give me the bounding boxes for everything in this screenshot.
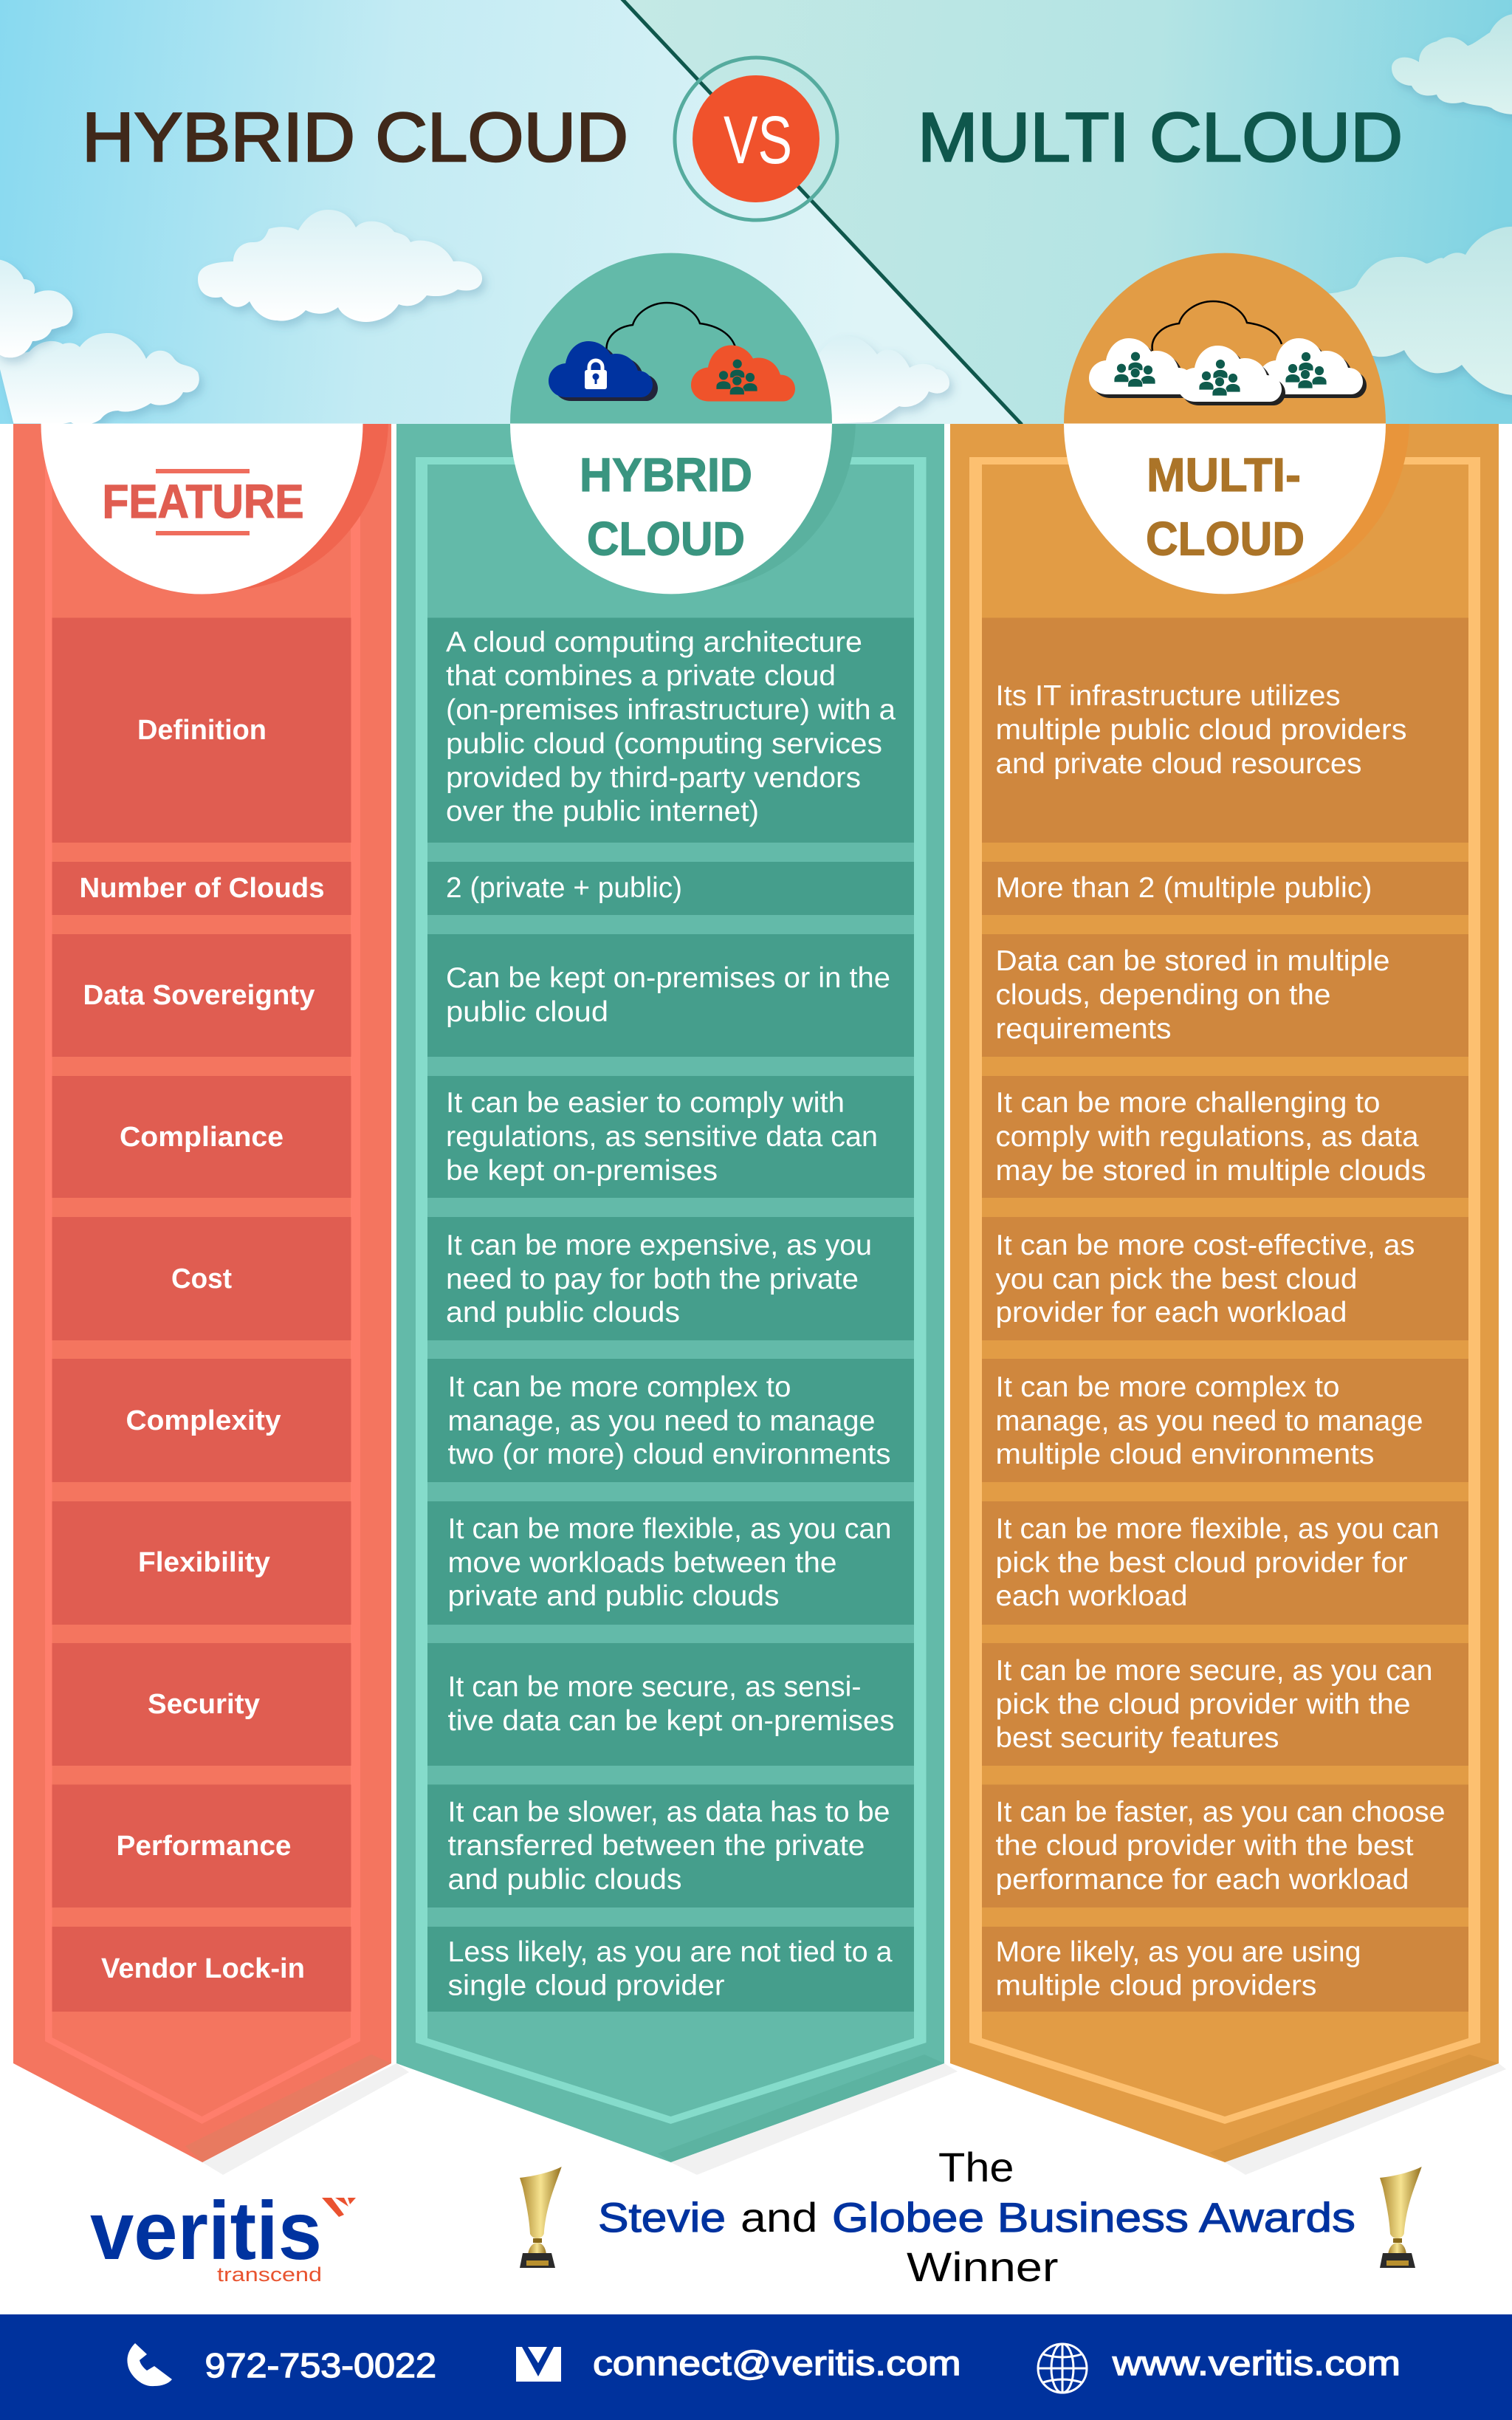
cloud: behind hybrid circle (812, 336, 949, 424)
hybrid text: two (or more) cloud environments (447, 1439, 890, 1470)
multi text: Data can be stored in multiple (995, 945, 1389, 977)
multi text: multiple public cloud providers (995, 714, 1407, 746)
multi text: provider for each workload (995, 1297, 1347, 1329)
website: www.veritis.com (1112, 2344, 1401, 2382)
multi text: It can be more complex to (995, 1371, 1339, 1403)
multi text: It can be more secure, as you can (995, 1655, 1432, 1687)
hybrid text: Less likely, as you are not tied to a (447, 1936, 893, 1968)
hybrid text: single cloud provider (447, 1970, 725, 2001)
vs badge: VS (724, 103, 792, 178)
multi heading badge (1064, 253, 1386, 594)
multi text: It can be more cost-effective, as (995, 1230, 1415, 1261)
diagonal divider line (622, 0, 1022, 425)
multi text: clouds, depending on the (995, 979, 1330, 1011)
hybrid text: tive data can be kept on-premises (447, 1705, 895, 1737)
panel shadows (202, 2063, 1506, 2175)
hybrid text: regulations, as sensitive data can (446, 1121, 878, 1153)
award text: and (740, 2194, 818, 2241)
feature rows: Security (148, 1689, 260, 1720)
multi heading badge: CLOUD (1146, 513, 1305, 566)
vs badge (675, 58, 837, 220)
logo: veritis transcend: transcend (217, 2263, 322, 2286)
multi heading badge: MULTI- (1147, 448, 1301, 501)
award text: Stevie (598, 2194, 726, 2241)
feature rows: Vendor Lock-in (101, 1953, 305, 1984)
multi text: manage, as you need to manage (995, 1405, 1423, 1437)
multi text: requirements (995, 1013, 1171, 1045)
icon: hybrid cloud connection (549, 303, 795, 402)
hybrid text: move workloads between the (447, 1547, 837, 1579)
icon: phone (127, 2343, 172, 2386)
footer contact bar (0, 2314, 1512, 2420)
multi text: Its IT infrastructure utilizes (995, 680, 1341, 712)
feature rows: Flexibility (138, 1547, 270, 1578)
hybrid heading badge (510, 253, 832, 594)
hybrid text (446, 626, 896, 2001)
header sky background (0, 0, 1512, 424)
hybrid text: transferred between the private (447, 1830, 865, 1862)
multi text: pick the best cloud provider for (995, 1547, 1408, 1579)
award text: Winner (907, 2244, 1059, 2290)
title: hybrid cloud: HYBRID CLOUD (82, 98, 628, 176)
feature rows: Complexity (126, 1405, 281, 1436)
email address: connect@veritis.com (593, 2344, 961, 2382)
panel: multi-cloud column (950, 249, 1499, 2162)
feature rows (52, 617, 351, 2012)
panel: feature column (13, 249, 391, 2162)
feature heading badge (41, 424, 363, 594)
phone number: 972-753-0022 (205, 2346, 436, 2385)
feature heading badge: FEATURE (102, 475, 304, 528)
multi text: multiple cloud providers (995, 1970, 1317, 2001)
feature rows: Number of Clouds (80, 873, 325, 904)
hybrid text: It can be more secure, as sensi- (447, 1671, 861, 1703)
hybrid text: provided by third-party vendors (446, 762, 861, 794)
feature rows: Definition (137, 715, 267, 746)
decorative clouds (0, 14, 1512, 428)
multi text: you can pick the best cloud (995, 1264, 1357, 1295)
hybrid text: Can be kept on-premises or in the (446, 962, 890, 994)
hybrid text: and public clouds (447, 1864, 682, 1896)
cloud: centre (198, 210, 482, 322)
hybrid text: manage, as you need to manage (447, 1405, 876, 1437)
hybrid text: It can be more complex to (447, 1371, 791, 1403)
hybrid heading badge: CLOUD (587, 513, 745, 566)
icon: multi cloud connection (1089, 301, 1367, 405)
hybrid heading badge: HYBRID (580, 448, 752, 501)
hybrid text: A cloud computing architecture (446, 626, 862, 659)
feature rows: Performance (117, 1831, 291, 1862)
logo: veritis transcend: veritis (90, 2185, 322, 2277)
multi text: multiple cloud environments (995, 1439, 1375, 1470)
multi text: More likely, as you are using (995, 1936, 1361, 1968)
hybrid text: It can be more flexible, as you can (447, 1513, 892, 1545)
hybrid text: that combines a private cloud (446, 660, 836, 692)
multi text: performance for each workload (995, 1864, 1409, 1896)
hybrid text: need to pay for both the private (446, 1264, 859, 1295)
multi text: It can be more challenging to (995, 1087, 1381, 1119)
multi text: pick the cloud provider with the (995, 1688, 1410, 1721)
hybrid rows (427, 617, 914, 2012)
award text (598, 2144, 1355, 2290)
icon: left trophy (520, 2167, 562, 2268)
icon: globe (1038, 2344, 1087, 2393)
multi text: best security features (995, 1722, 1279, 1754)
multi text: the cloud provider with the best (995, 1830, 1414, 1862)
multi text: comply with regulations, as data (995, 1121, 1419, 1153)
hybrid text: (on-premises infrastructure) with a (446, 694, 896, 726)
hybrid text: It can be slower, as data has to be (447, 1796, 890, 1828)
hybrid text: be kept on-premises (446, 1155, 718, 1187)
multi text: each workload (995, 1580, 1187, 1612)
multi text (995, 680, 1446, 2001)
hybrid text: public cloud (computing services (446, 728, 882, 760)
cloud: right (1314, 227, 1512, 395)
award text: Globee Business Awards (832, 2194, 1355, 2241)
icon: envelope (516, 2347, 561, 2382)
multi rows (982, 617, 1468, 2012)
multi text: may be stored in multiple clouds (995, 1155, 1426, 1187)
cloud: upper left (0, 259, 73, 357)
title: multi cloud: MULTI CLOUD (918, 98, 1403, 176)
hybrid text: private and public clouds (447, 1580, 780, 1612)
feature rows: Cost (171, 1264, 232, 1295)
multi text: and private cloud resources (995, 748, 1361, 780)
hybrid text: It can be more expensive, as you (446, 1230, 872, 1261)
cloud: top right (1392, 14, 1512, 114)
cloud: lower left (0, 333, 199, 428)
hybrid text: 2 (private + public) (446, 872, 682, 904)
multi text: It can be faster, as you can choose (995, 1796, 1446, 1828)
hybrid text: public cloud (446, 996, 608, 1028)
feature rows: Data Sovereignty (83, 980, 315, 1011)
multi text: More than 2 (multiple public) (995, 872, 1372, 904)
award text: The (938, 2144, 1014, 2190)
multi text: It can be more flexible, as you can (995, 1513, 1440, 1545)
panel: hybrid cloud column (396, 249, 944, 2162)
feature rows: Compliance (120, 1122, 284, 1153)
hybrid text: It can be easier to comply with (446, 1087, 845, 1119)
hybrid text: over the public internet) (446, 796, 759, 827)
hybrid text: and public clouds (446, 1297, 680, 1329)
icon: right trophy (1380, 2167, 1422, 2268)
